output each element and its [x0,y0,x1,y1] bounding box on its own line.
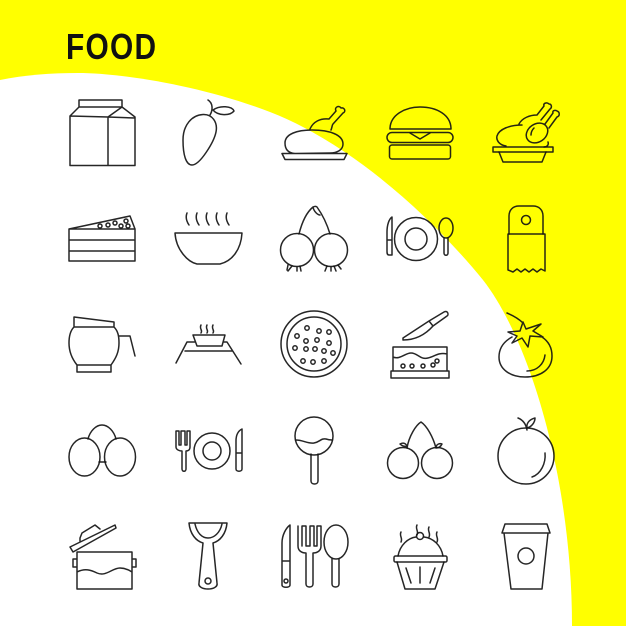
icon: pizza [281,311,347,377]
icon: knife, fork and spoon [282,525,348,587]
icon: covered dish cupcake [394,525,447,589]
icon: burger [387,107,453,159]
icon: cooking pot with lid [70,525,136,589]
icon: eggs [69,425,136,476]
icon: coffee pot [69,317,135,372]
icon: peeler [189,523,227,589]
icon: cherries [388,422,452,478]
icon: orange [498,418,554,484]
title: FOOD [66,27,157,68]
icon: plate with knife and spoon [387,217,453,260]
icon: onions [280,206,348,271]
icon: soup bowl [175,213,242,264]
icon: chicken on tray [493,103,559,162]
icon: takeaway cup [502,524,550,589]
icon: cake slice [69,216,135,261]
icon: tomato [499,313,552,377]
icon: knife and cake [391,312,449,378]
icon: mango [183,100,234,165]
icon: lollipop [295,417,333,484]
icon: roast chicken on plate [282,107,347,160]
icon: milk carton [70,100,135,166]
icon: fork, plate and knife [176,429,242,471]
icon: tray table with dish [176,325,241,364]
icon: napkin holder [508,206,545,272]
